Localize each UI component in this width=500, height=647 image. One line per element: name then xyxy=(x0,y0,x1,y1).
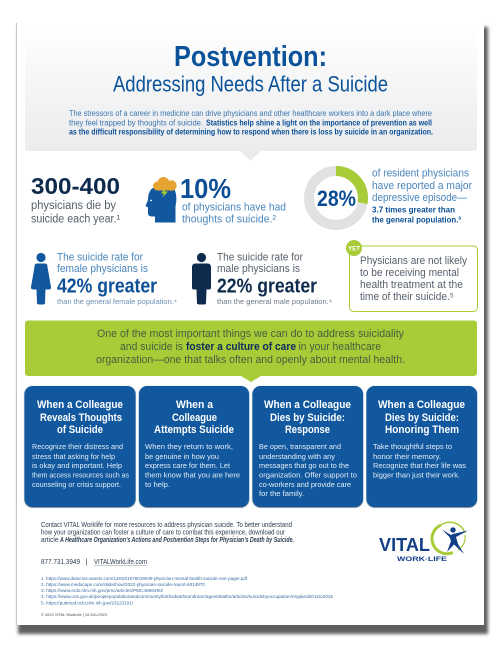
panel: dies by suicide response: Dies by Suicide: xyxy=(270,412,345,424)
chart: 28 percent donut: 28% xyxy=(317,186,356,211)
text block: contact: how your organization can foster a culture of care to combat this experience, download our xyxy=(41,530,286,536)
panel: dies by suicide response: messages that go out to the xyxy=(259,461,349,470)
contact details: | xyxy=(86,557,88,566)
stat: male rate xyxy=(217,252,332,306)
stat: resident physicians: of resident physicians xyxy=(372,168,469,180)
references: 2. https://www.medscape.com/slideshow/2022-physician-suicide-report-6014870 xyxy=(41,582,206,587)
callout: yet: health treatment at the xyxy=(360,279,463,291)
panel: dies by suicide honoring: Recognize that their life was xyxy=(373,461,466,470)
contact details: VITALWorkLife.com xyxy=(94,557,147,566)
panel: dies by suicide honoring: Dies by Suicide: xyxy=(385,412,459,424)
contact details: 877.731.3949 xyxy=(41,557,80,566)
panel: reveals thoughts: Reveals Thoughts xyxy=(40,412,122,424)
panel: dies by suicide response: When a Colleague xyxy=(264,399,351,411)
logo: VITAL WorkLife: WORK·LIFE xyxy=(397,556,448,563)
panel: culture of care: organization—one that talks often and openly about mental health. xyxy=(96,354,405,366)
callout: yet: to be receiving mental xyxy=(360,267,459,279)
panel: dies by suicide honoring: honor their memory. xyxy=(373,452,441,461)
icon: female figure xyxy=(31,253,51,304)
stat: female rate: The suicide rate for xyxy=(57,252,143,264)
stat: female rate: than the general female population.⁴ xyxy=(57,297,177,306)
stat: resident physicians: 3.7 times greater than xyxy=(372,205,455,215)
panel: culture of care: in your healthcare xyxy=(298,341,381,353)
panel: dies by suicide response: Response xyxy=(285,424,330,436)
stat: 300-400 physicians: 300-400 xyxy=(31,173,120,199)
stat: female rate: 42% greater xyxy=(57,275,157,298)
stat: resident physicians: the general population.³ xyxy=(372,215,461,225)
panel: attempts suicide xyxy=(139,386,249,508)
intro text xyxy=(69,109,433,136)
panel: culture of care xyxy=(25,320,477,382)
panel: attempts suicide: be genuine in how you xyxy=(145,452,219,461)
icon: head with storm cloud xyxy=(146,177,177,222)
panel: dies by suicide honoring: Honoring Them xyxy=(385,424,459,436)
panel: reveals thoughts xyxy=(24,386,136,508)
logo: VITAL WorkLife xyxy=(379,522,468,563)
panel: reveals thoughts: counseling or crisis support. xyxy=(32,480,121,489)
panel: dies by suicide response: Be open, transparent and xyxy=(259,442,341,451)
panel: dies by suicide response: organization. Offer support to xyxy=(259,470,357,480)
chart: 28 percent donut xyxy=(309,171,363,225)
stat: male rate: than the general male population.⁴ xyxy=(217,297,332,306)
stat: female rate xyxy=(57,252,177,306)
panel: attempts suicide: express care for them. Let xyxy=(145,461,231,470)
panel: header xyxy=(25,23,477,160)
panel: reveals thoughts: them access resources such as xyxy=(32,470,129,480)
references xyxy=(41,576,334,606)
intro text: Statistics help shine a light on the importance of prevention as well xyxy=(206,118,432,128)
stat: 300-400 physicians: suicide each year.¹ xyxy=(31,214,120,226)
panel: dies by suicide response: co-workers and provide care xyxy=(259,480,351,489)
panel: dies by suicide response xyxy=(252,386,363,508)
panel: culture of care: One of the most important things we can do to address suicidality xyxy=(97,328,405,340)
stat: 10 percent: 10% xyxy=(180,173,231,204)
stat: resident physicians: depressive episode— xyxy=(372,192,468,204)
callout: yet: Physicians are not likely xyxy=(360,255,467,267)
stat: 10 percent xyxy=(180,173,286,226)
subtitle: Addressing Needs After a Suicide xyxy=(113,72,388,96)
stat: male rate: 22% greater xyxy=(217,275,317,298)
panel: dies by suicide honoring: bigger than just their work. xyxy=(373,470,460,480)
panel: dies by suicide honoring xyxy=(366,386,477,508)
panel: dies by suicide response: for the family. xyxy=(259,489,304,498)
intro text: they feel trapped by thoughts of suicide. xyxy=(69,118,203,128)
stat: 300-400 physicians xyxy=(31,173,120,226)
references: 3. https://www.ncbi.nlm.nih.gov/pmc/articles/PMC4866490/ xyxy=(41,588,164,593)
callout: yet: time of their suicide.⁵ xyxy=(360,291,454,303)
panel: reveals thoughts: of Suicide xyxy=(57,424,103,436)
stat: male rate: male physicians is xyxy=(217,263,300,275)
logo: VITAL WorkLife: VITAL xyxy=(379,535,430,555)
callout: yet: YET xyxy=(348,246,360,252)
stat: resident physicians xyxy=(372,168,472,225)
copyright: © 2023 VITAL WorkLife | 10-541-0923 xyxy=(41,613,107,617)
contact details xyxy=(41,557,147,566)
panel: attempts suicide: to help. xyxy=(145,480,170,489)
stat: male rate: The suicide rate for xyxy=(217,252,303,264)
references: 5. https://pubmed.ncbi.nlm.nih.gov/23123101/ xyxy=(41,600,134,606)
references: 4. https://www.ons.gov.uk/peoplepopulationandcommunity/birthsdeathsandmarriages/deaths/articles/suicidebyoccupation/england2011to2015 xyxy=(41,594,334,599)
stat: 300-400 physicians: physicians die by xyxy=(31,200,116,212)
text block: contact: article xyxy=(41,537,59,544)
panel: reveals thoughts: Recognize their distress and xyxy=(32,442,123,451)
stat: resident physicians: have reported a major xyxy=(372,180,472,192)
stat: 10 percent: of physicians have had xyxy=(182,202,286,214)
title: Postvention: xyxy=(174,41,327,73)
panel: attempts suicide: When a xyxy=(176,399,213,411)
stat: female rate: female physicians is xyxy=(57,263,148,275)
icon: male figure xyxy=(192,253,211,304)
panel: attempts suicide: them know that you are here xyxy=(145,470,240,480)
panel: dies by suicide honoring: When a Colleague xyxy=(378,399,465,411)
panel: reveals thoughts: is okay and important. Help xyxy=(32,461,122,470)
panel: culture of care: and suicide is xyxy=(120,341,183,353)
panel: reveals thoughts: stress that asking for help xyxy=(32,452,115,461)
intro text: as the difficult responsibility of determining how to respond when there is loss by suicide in an organization. xyxy=(69,128,433,136)
panel: attempts suicide: Attempts Suicide xyxy=(154,424,234,436)
references: 1. https://www.datocms-assets.com/12810/1578019049-physician-mental-health-suicide-one-pager.pdf xyxy=(41,576,248,581)
panel: attempts suicide: Colleague xyxy=(172,412,217,424)
panel: attempts suicide: When they return to work, xyxy=(145,442,233,451)
intro text: The stressors of a career in medicine can drive physicians and other healthcare workers into a dark place where xyxy=(69,109,432,118)
panel: dies by suicide honoring: Take thoughtful steps to xyxy=(373,442,452,451)
callout: yet xyxy=(346,240,478,312)
panel: reveals thoughts: When a Colleague xyxy=(37,399,123,411)
text block: contact: A Healthcare Organization’s Actions and Postvention Steps for Physician’s Death by Suicide. xyxy=(59,537,294,544)
panel: dies by suicide response: understanding with any xyxy=(259,452,335,461)
text block: contact xyxy=(41,522,294,544)
panel: culture of care: foster a culture of care xyxy=(186,341,296,353)
stat: 10 percent: thoughts of suicide.² xyxy=(182,214,276,226)
text block: contact: Contact VITAL Worklife for more resources to address physician suicide. To better understand xyxy=(41,522,292,529)
